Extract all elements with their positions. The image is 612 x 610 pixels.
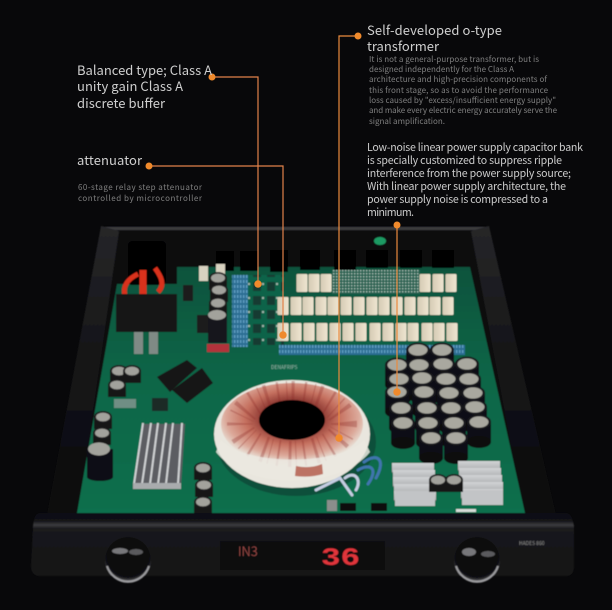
small capacitors near buffer [183,272,229,352]
large left capacitors [87,411,113,481]
heading: transformer: transformer [367,36,440,55]
brand label: HADES 860 [519,540,545,547]
text: attenuator description [78,182,203,204]
callout: attenuator leader [146,162,287,339]
text: capacitor bank description: minimum. [367,205,414,220]
heading: transformer: Self-developed o-type [367,20,502,39]
text: transformer description: designed independently for the Class A [369,64,514,75]
text: transformer description: signal amplification. [369,116,445,127]
text: capacitor bank description: With linear power supply architecture, the [367,179,566,194]
toroidal transformer [214,380,376,496]
callout: transformer leader [335,32,362,442]
text: transformer description: and make every electric energy accurately serve the [369,105,558,116]
heading: buffer [77,60,212,112]
left heat sink [133,423,185,489]
text: capacitor bank description: is specially customized to suppress ripple [367,153,562,168]
blue resistor strips and driver circuit [232,270,465,355]
callout lines and dots [146,32,401,442]
rear connectors [128,237,454,285]
heading: attenuator: attenuator [77,150,143,169]
text: transformer description: It is not a general-purpose transformer, but is [369,54,539,65]
board bottom parts [327,500,476,512]
text: capacitor bank description: power supply noise is compressed to a [367,192,548,207]
text: attenuator description: controlled by microcontroller [78,193,203,204]
text: transformer description [369,54,558,127]
blue and white transformer leads [316,458,380,495]
input display: IN3 [238,541,258,560]
mains transformer block with red wires [116,268,177,354]
heading: buffer: Balanced type; Class A [77,60,212,79]
right volume knob [454,537,500,583]
amplifier chassis photo [31,226,574,583]
front panel [31,513,574,583]
callout: capacitor leader [393,222,401,396]
capacitor bank [385,342,491,464]
callout: buffer leader [208,74,262,288]
volume display: 36 [321,544,360,573]
black relays [157,360,213,403]
text: capacitor bank description: Low-noise linear power supply capacitor bank [367,140,583,155]
capacitors beside toroid [194,462,213,514]
left small components [108,364,298,411]
right heat sinks [392,461,503,506]
text: transformer description: architecture and high-precision components of [369,74,547,85]
left small components: DENAFRIPS [271,364,298,371]
text: attenuator description: 60-stage relay step attenuator [78,182,203,193]
heading: transformer [367,20,502,55]
heading: buffer: unity gain Class A [77,76,183,95]
left volume knob [105,537,151,583]
text: capacitor bank description: interference from the power supply source; [367,166,571,181]
relay banks [278,274,458,341]
text: transformer description: this front stage, so as to avoid the performance [369,85,549,96]
text: transformer description: loss caused by "excess/insufficient energy supply" [369,95,556,106]
heading: buffer: discrete buffer [77,93,166,112]
text: capacitor bank description [367,140,583,220]
chassis walls [47,226,556,515]
circuit board [77,267,525,513]
